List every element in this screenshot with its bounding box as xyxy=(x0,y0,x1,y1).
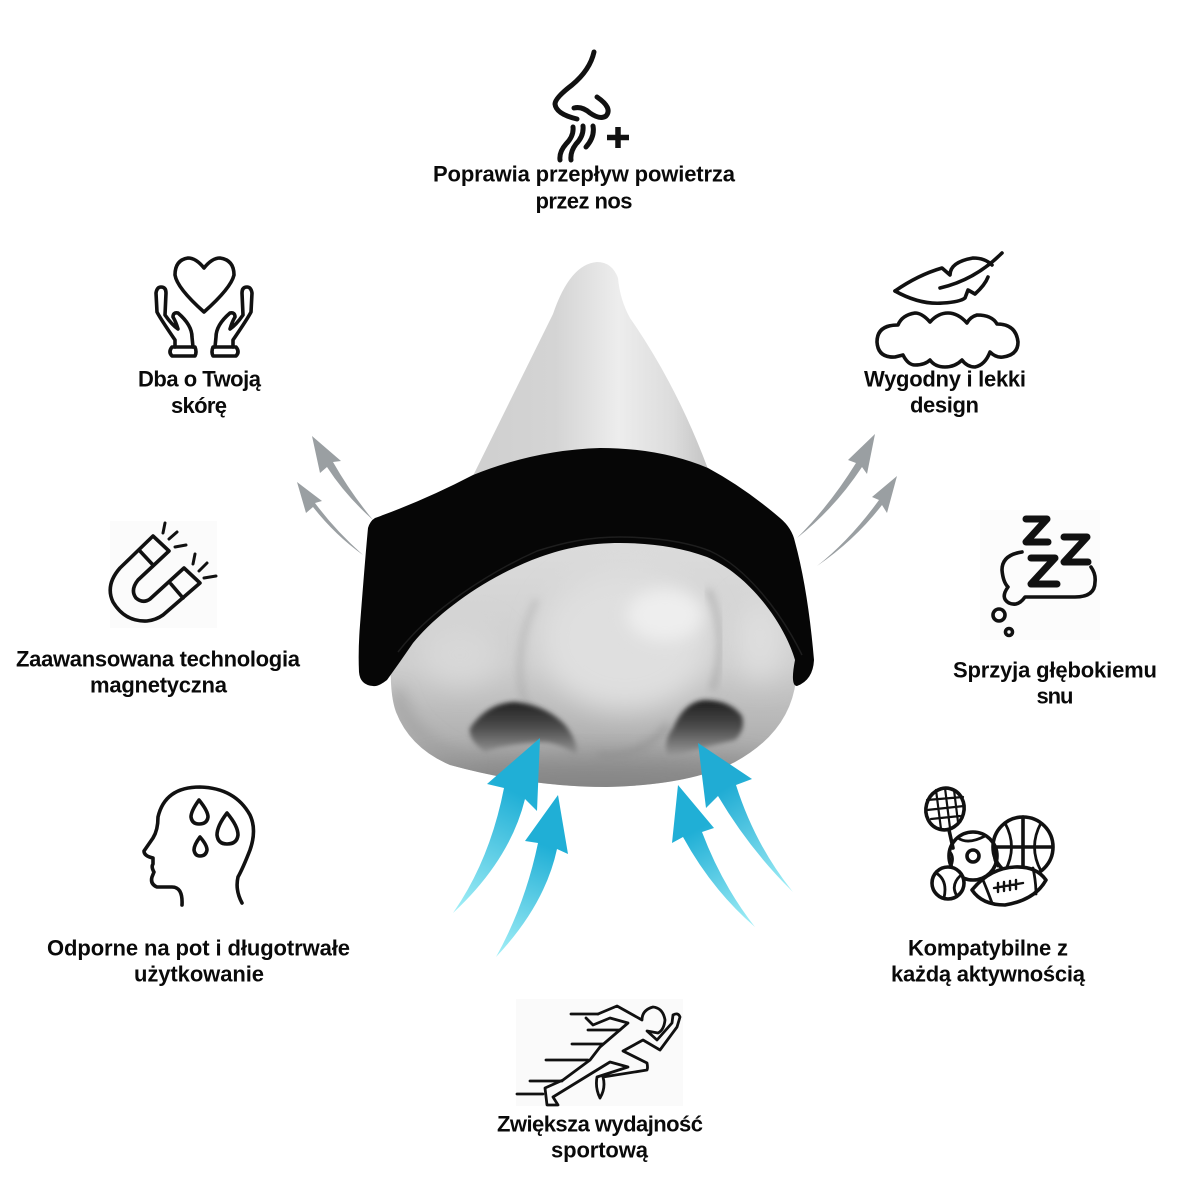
nose bridge xyxy=(466,262,712,490)
text: magnet: Zaawansowana technologia xyxy=(16,646,301,672)
nostril right xyxy=(666,700,743,758)
arrow blue 2 xyxy=(496,795,568,957)
text: comfort xyxy=(864,366,1026,418)
arrow grey upper right xyxy=(797,434,875,538)
text: comfort: design xyxy=(910,392,979,418)
arrow blue 4 xyxy=(698,743,793,892)
arrows: outflow xyxy=(297,434,897,566)
magnetic strip xyxy=(359,448,814,686)
icon: heart in hands xyxy=(156,258,252,356)
icon: zzz xyxy=(993,519,1095,636)
panel: sports xyxy=(891,784,1086,986)
arrow blue 1 xyxy=(453,738,540,913)
panel: sweat xyxy=(47,787,350,986)
icon background xyxy=(980,510,1100,640)
text: performance: Zwiększa wydajność xyxy=(497,1112,703,1136)
arrow grey upper left xyxy=(312,436,373,520)
icon: nose plus xyxy=(555,52,629,160)
text: airflow: przez nos xyxy=(536,188,632,214)
text: sleep: snu xyxy=(1036,684,1074,708)
text: sweat: Odporne na pot i długotrwałe xyxy=(47,936,350,960)
icon: feather over cloud xyxy=(877,253,1018,367)
text: comfort: Wygodny i lekki xyxy=(864,366,1026,392)
icon: runner xyxy=(517,1006,680,1105)
icon: sports balls xyxy=(921,784,1053,905)
panel: magnet xyxy=(16,521,301,698)
panel: comfort xyxy=(864,253,1026,418)
icon background xyxy=(516,999,683,1106)
text: skin: skórę xyxy=(171,393,227,418)
panel: sleep xyxy=(953,510,1157,708)
nostril left xyxy=(470,702,577,756)
text: sweat: użytkowanie xyxy=(134,962,264,986)
text: sleep: Sprzyja głębokiemu xyxy=(953,658,1157,682)
panel: airflow xyxy=(433,52,736,214)
text: magnet xyxy=(16,646,301,698)
nose lower body xyxy=(390,543,796,787)
arrow blue 3 xyxy=(672,785,755,927)
arrow grey lower left xyxy=(297,482,363,555)
arrow grey lower right xyxy=(817,476,897,566)
central nose with magnetic strip xyxy=(359,262,814,800)
text: magnet: magnetyczna xyxy=(90,672,228,698)
text: performance: sportową xyxy=(551,1138,649,1162)
text: airflow: Poprawia przepływ powietrza xyxy=(433,162,736,186)
text: sports: Kompatybilne z xyxy=(908,936,1068,960)
text: sports: każdą aktywnością xyxy=(891,962,1086,986)
text: skin: Dba o Twoją xyxy=(138,366,262,392)
arrows: air inflow xyxy=(453,738,793,957)
text: performance xyxy=(497,1112,703,1162)
text: sports xyxy=(891,936,1086,986)
icon: magnet xyxy=(110,523,216,621)
panel: performance xyxy=(497,999,703,1162)
text: sleep xyxy=(953,658,1157,708)
panel: skin xyxy=(138,258,262,418)
text: skin xyxy=(138,366,262,418)
text: airflow xyxy=(433,162,736,214)
text: sweat xyxy=(47,936,350,986)
icon background xyxy=(110,521,217,628)
icon: head with drops xyxy=(144,787,254,905)
